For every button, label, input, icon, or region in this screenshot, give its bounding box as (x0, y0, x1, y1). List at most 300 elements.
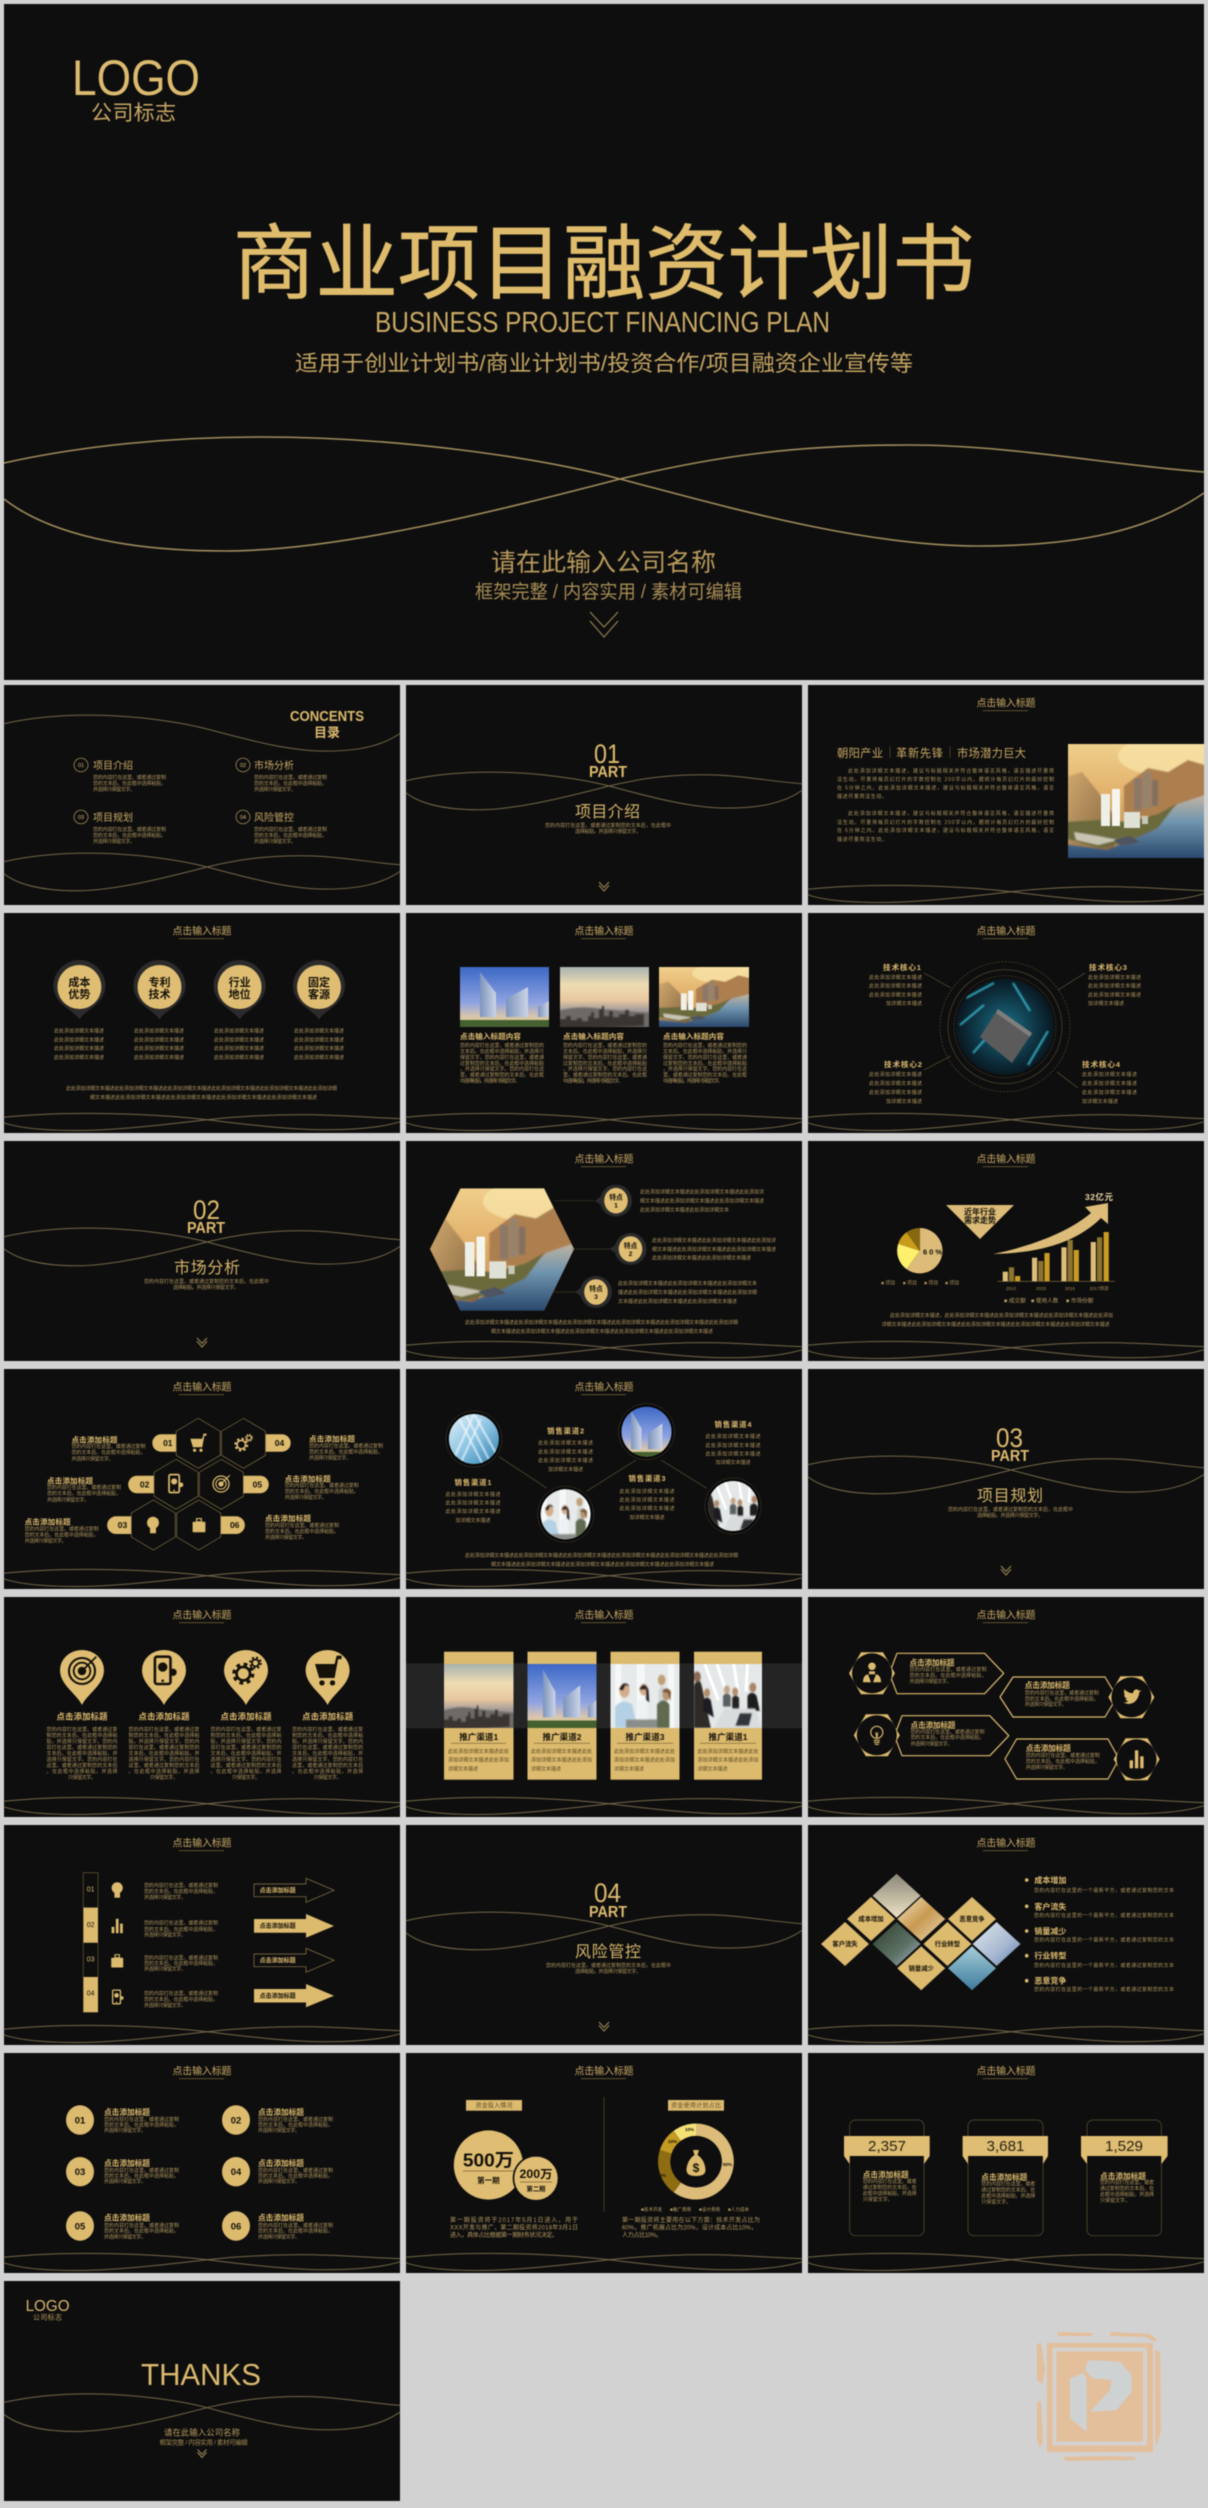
item 01: 01 (78, 763, 84, 769)
icon: chevrons (198, 2450, 206, 2458)
item 05: 05 (75, 2222, 86, 2232)
item 04: 您的内容打在这里。或者通过复制 (254, 826, 327, 833)
risk list (1025, 1875, 1174, 1993)
panel: cover slide (4, 4, 1204, 680)
label: funding usage: 资金使用计划占比 (671, 2102, 721, 2110)
company name: 请在此输入公司名称 (491, 549, 716, 577)
column 1: 容打在这里。或者通过复制您的 (46, 1744, 118, 1751)
slide title: 点击输入标题 (574, 1152, 634, 1166)
step text 1 (144, 1882, 218, 1901)
label 03: 您的内容打在这里。或者通过复制 (25, 1526, 99, 1532)
phase text: 第一期投资将于2017年5月1日进入，用于 (450, 2216, 578, 2224)
icon: bulb (854, 1714, 900, 1756)
step text 2: 并选择只保留文字。 (144, 1932, 186, 1938)
panel: three images (406, 913, 802, 1133)
pin: 成本优势: 优势 (68, 987, 90, 1001)
channel 2: 销售渠道2 (547, 1426, 584, 1436)
circle: phase one (454, 2130, 523, 2200)
channel 2: 此处添加详细文本描述 (538, 1457, 593, 1464)
diamond labels: 行业转型 (935, 1939, 960, 1948)
step text 3: 您的内容打在这里。或者通过复制 (144, 1954, 218, 1962)
dotted connectors (552, 1201, 611, 1292)
summary text: 详细文本描述此处添加详细文本描述此处添加详细文本描述此处添加详细文本描述此处添加详细文本描述 (882, 1321, 1110, 1328)
column 3 (210, 1712, 282, 1781)
card 2: 详细文本描述 (531, 1766, 561, 1772)
item 04: 并选择只保留文字。 (254, 838, 296, 845)
photo D (705, 1478, 762, 1534)
wave decoration (4, 437, 1204, 551)
column 2: 容打在这里。或者通过复制您的 (128, 1744, 200, 1751)
photo B (618, 1404, 676, 1460)
icon: money bag (686, 2150, 706, 2176)
pie chart: 60% (923, 1248, 942, 1256)
panel: hexagon labels (808, 1597, 1204, 1817)
card 3,681: 3,681 (986, 2138, 1024, 2155)
column 1 text: 文本后。在此框中选择粘贴，并选择只 (460, 1048, 544, 1055)
feature 1 text (640, 1188, 764, 1214)
risk list: 销量减少 (1034, 1926, 1066, 1936)
label box D (1005, 1739, 1119, 1779)
column 1 text: ，并选择只保留文字。您的内容打在这 (460, 1066, 544, 1072)
label 04: 您的内容打在这里。或者通过复制 (309, 1442, 383, 1450)
item 02 (236, 758, 327, 793)
step bar: 02 (87, 1922, 95, 1929)
label box C: 您的内容打在这里。或者通过复制 (910, 1728, 984, 1736)
paragraph 1: 在 5分钟之内。此处添加详细文本描述，建议与标题相关并符合整体语言风格，语言 (837, 784, 1054, 792)
item 04: 04 (240, 815, 246, 821)
label 06: 您的内容打在这里。或者通过复制 (265, 1522, 339, 1529)
tab numbers: 04 (275, 1438, 284, 1448)
logo: 公司标志 (91, 102, 176, 125)
column texts: 此处添加详细文本描述 (134, 1036, 184, 1044)
channel 2: 此处添加详细文本描述 (538, 1448, 593, 1456)
label 05: 点击添加标题 (285, 1474, 331, 1484)
wave bottom (4, 853, 400, 891)
item 06: 06 (231, 2222, 241, 2232)
panel: thanks (4, 2281, 400, 2501)
column 4: 只保留文字。 (314, 1774, 342, 1781)
panel: part 04 (406, 1825, 802, 2045)
description: 您的内容打在这里。或者通过复制您的文本后，在此框中 (948, 1506, 1073, 1513)
slide title: 点击输入标题 (976, 1152, 1036, 1166)
diamond photos (873, 1874, 1021, 1990)
pin: 固定客源 (293, 960, 345, 1020)
triangle callout: 需求走势 (964, 1215, 996, 1225)
slide title: 点击输入标题 (172, 1608, 232, 1622)
card 3: 详细文本描述 (614, 1766, 644, 1772)
risk list: 恶意竞争 (1034, 1976, 1066, 1986)
label box B: 您的内容打在这里。或者通过复制 (1025, 1690, 1099, 1696)
logo: LOGO (26, 2298, 70, 2315)
column 1 text (460, 1031, 544, 1084)
column 3: 。在此框中选择粘贴，并选择 (210, 1768, 282, 1775)
channel 1: 加详细文本描述 (456, 1517, 490, 1524)
channel 4: 此处添加详细文本描述 (706, 1450, 760, 1458)
summary text (66, 1085, 337, 1101)
card 2,357: 您的内容打在这里。或者 (863, 2178, 917, 2185)
card 4: 推广渠道1 (708, 1732, 748, 1742)
label box D: 您的内容打在这里。或者通过复制 (1026, 1752, 1100, 1759)
step text 3 (144, 1954, 218, 1972)
panel: hexagon icons (4, 1369, 400, 1589)
card 3: 推广渠道3 (626, 1732, 665, 1742)
circle: phase two: 第二期 (527, 2184, 545, 2193)
tabs (107, 1434, 291, 1534)
item 04 (236, 810, 327, 845)
description: 您的内容打在这里。或者通过复制您的文本后，在此框中 (546, 1962, 671, 1969)
item 03: 您的文本后，在此框中选择粘贴， (93, 832, 166, 839)
part number: 03 (996, 1423, 1023, 1453)
column 3 text: 您的内容打在这里，或者通过复制您的 (663, 1042, 747, 1049)
panel: sales channels (406, 1369, 802, 1589)
slide title: 点击输入标题 (976, 696, 1036, 710)
label 05: 您的内容打在这里。或者通过复制 (285, 1482, 359, 1489)
label: 技术核心2 (869, 1059, 922, 1105)
column 2 text: 里，或者通过复制您的文本后。在此框 (563, 1072, 647, 1078)
step text 1: 您的文本后。在此框中选择粘贴， (144, 1888, 218, 1895)
card 1,529: 通过复制您的文本后。在 (1100, 2185, 1154, 2192)
item 03: 您的文本后。在此框中选择粘贴， (104, 2172, 179, 2180)
panel: market charts (808, 1141, 1204, 1361)
label 06: 并选择只保留文字。 (265, 1534, 307, 1541)
pie legend: ■ 项目 (903, 1280, 917, 1286)
grey strip (406, 1663, 802, 1728)
tab numbers: 05 (253, 1480, 262, 1490)
label 04: 点击添加标题 (309, 1434, 355, 1444)
panel: three features hexagon (406, 1141, 802, 1361)
column 1 (46, 1712, 118, 1781)
slide title: 点击输入标题 (172, 2064, 232, 2078)
item 05: 并选择只保留文字。 (104, 2234, 146, 2240)
slide title: 点击输入标题 (574, 1608, 634, 1622)
feature 3 text: 描述此处添加详细文本描述此处添加详细文本描述此处添加详细 (618, 1289, 757, 1296)
step bar (83, 1873, 98, 2012)
badge: 特点3 (575, 1276, 612, 1308)
logo (26, 2298, 70, 2322)
donut chart (657, 2124, 734, 2199)
column 1 text: 过复制您的文本后。在此框中选择粘贴 (460, 1060, 544, 1067)
item 02 (222, 2105, 333, 2135)
part number: 02 (193, 1195, 220, 1225)
slide title: 点击输入标题 (574, 2064, 634, 2078)
phase text: XXX开发与推广，第二期投资将2018年3月1日 (450, 2224, 578, 2232)
channel 4 (706, 1420, 760, 1466)
icon: bars (1114, 1738, 1160, 1780)
card 1 (442, 1652, 516, 1780)
section title: 项目介绍 (575, 803, 640, 821)
panel: four advantages (4, 913, 400, 1133)
step text 4 (144, 1990, 218, 2009)
card 2,357: 只保留文字。 (863, 2196, 893, 2203)
tab numbers: 06 (230, 1520, 240, 1530)
description: 您的内容打在这里。或者通过复制您的文本后，在此框中 (545, 822, 671, 829)
card 3,681: 点击添加标题 (981, 2172, 1028, 2182)
column 1: 您的内容打在这里。或者通过复 (46, 1726, 118, 1733)
column 2 text: 中选择粘贴，并选择只保留文字。 (563, 1078, 623, 1084)
usage text: 60%，推广拓展占比为20%，设计成本占比10%， (622, 2224, 757, 2232)
column 2: 这里。或者通过复制您的文本后 (128, 1762, 200, 1769)
item 04: 并选择只保留文字。 (258, 2178, 300, 2185)
step text 4: 并选择只保留文字。 (144, 2002, 186, 2009)
label 05: 并选择只保留文字。 (285, 1494, 327, 1501)
card 1,529: 您的内容打在这里。或者 (1100, 2179, 1154, 2186)
channel 4: 此处添加详细文本描述 (706, 1442, 760, 1449)
panel: contents (4, 685, 400, 905)
badge: 特点1 (595, 1185, 632, 1217)
description: 选择粘贴，并选择只保留文字。 (575, 1968, 641, 1975)
label: funding input (466, 2100, 522, 2111)
card 2,357: 此框中选择粘贴，并选择 (863, 2190, 917, 2197)
label box A (889, 1653, 1004, 1694)
label 03: 您的文本后。在此框中选择粘贴， (25, 1532, 99, 1538)
image: towers (460, 967, 549, 1027)
label: 技术核心3 (1088, 962, 1141, 1007)
column 3 text: 过复制您的文本后。在此框中选择粘贴 (663, 1060, 747, 1067)
summary text: 此处添加详细文本描述此处添加详细文本描述此处添加详细文本描述此处添加详细文本描述此处添加详细文本描述此处添加详细 (465, 1552, 738, 1559)
pin: gears (224, 1650, 268, 1705)
description (948, 1506, 1073, 1519)
item 02: 02 (240, 763, 246, 769)
panel: promotion channels (406, 1597, 802, 1817)
slide title: 点击输入标题 (574, 1380, 634, 1394)
column 2 text: 您的内容打在这里，或者通过复制您的 (563, 1042, 647, 1049)
label: 技术核心1: 加详细文本描述 (886, 1000, 922, 1007)
summary text: 细文本描述此处添加详细文本描述此处添加详细文本描述此处添加详细文本描述此处添加详细文本描述 (491, 1328, 713, 1335)
column texts: 此处添加详细文本描述 (54, 1045, 104, 1052)
label 02: 点击添加标题 (47, 1476, 93, 1486)
tab numbers: 02 (140, 1480, 150, 1490)
label 01: 您的内容打在这里。或者通过复制 (72, 1443, 146, 1450)
pie legend: ■ 项目 (945, 1280, 959, 1286)
step text 1: 并选择只保留文字。 (144, 1894, 186, 1901)
slide title: 点击输入标题 (574, 924, 634, 938)
panel: six numbered items (4, 2053, 400, 2273)
column 1: 制您的文本后。在此框中选择粘 (46, 1732, 118, 1739)
diamond labels: 销量减少 (909, 1963, 934, 1972)
label: 技术核心4: 加详细文本描述 (1082, 1098, 1118, 1105)
icons (147, 1434, 252, 1533)
image: circuit chip (956, 978, 1054, 1076)
donut chart: 60% (723, 2162, 732, 2167)
connector lines (499, 1457, 707, 1491)
item 05 (66, 2211, 179, 2241)
risk list: 您的内容打在这里的一个最新平方，或者通过复制您的文本 (1034, 1937, 1174, 1944)
description: 选择粘贴，并选择只保留文字。 (977, 1512, 1043, 1519)
pie legend: ■ 项目 (881, 1280, 895, 1286)
phase text: 进入，具体占比根据第一期财务状况决定。 (450, 2231, 558, 2239)
donut chart: 20% (657, 2173, 666, 2178)
label box D: 点击添加标题 (1026, 1743, 1071, 1753)
item 05: 点击添加标题 (104, 2212, 150, 2222)
item 03: 03 (78, 815, 84, 821)
step bar: 03 (87, 1956, 95, 1964)
label: 技术核心3: 技术核心3 (1089, 962, 1127, 972)
column 2 text: 过复制您的文本后。在此框中选择粘贴 (563, 1060, 647, 1067)
risk list: 客户流失 (1034, 1901, 1066, 1911)
risk list: 成本增加 (1034, 1875, 1066, 1885)
label 02: 您的内容打在这里。或者通过复制 (47, 1484, 121, 1491)
item 01: 您的内容打在这里。或者通过复制 (104, 2116, 179, 2123)
step text 3: 并选择只保留文字。 (144, 1966, 186, 1972)
item 04: 04 (231, 2167, 242, 2178)
logo: LOGO (72, 50, 200, 106)
card 3,681: 通过复制您的文本后。在 (981, 2186, 1035, 2194)
pin: 专利技术 (134, 960, 186, 1020)
feature 1 text: 此处添加详细文本描述此处添加详细文本描述此处添加详 (640, 1188, 764, 1196)
badge: 特点1: 1 (614, 1203, 618, 1210)
phase text (450, 2216, 578, 2239)
channel 4: 加详细文本描述 (716, 1459, 750, 1466)
column 3 text: ，并选择只保留文字。您的内容打在这 (663, 1066, 747, 1072)
column texts: 此处添加详细文本描述 (54, 1054, 104, 1061)
label: 技术核心1 (869, 962, 922, 1007)
column 3: 您的内容打在这里。或者通过复 (210, 1726, 282, 1733)
pie legend: ■ 项目 (924, 1280, 938, 1286)
paragraph 1: 描述尽量简洁生动。 (837, 793, 887, 800)
summary text: 细文本描述此处添加详细文本描述此处添加详细文本描述此处添加详细文本描述此处添加详细文本描述 (90, 1094, 317, 1101)
donut legend: ■推广费用 (670, 2206, 692, 2213)
card 1: 添加详细文本描述此处添加 (448, 1756, 509, 1764)
label: 技术核心1: 技术核心1 (883, 962, 922, 972)
column 4: 这里。或者通过复制您的文本后 (292, 1762, 363, 1769)
bar legend: ■ 成交额 (1004, 1296, 1026, 1304)
donut legend (641, 2206, 750, 2213)
label box B (1000, 1677, 1117, 1717)
icon: chevrons (599, 882, 609, 891)
item 03: 您的内容打在这里。或者通过复制 (93, 826, 166, 833)
logo: 公司标志 (33, 2312, 62, 2322)
column 2: 制您的文本后。在此框中选择粘 (128, 1732, 200, 1739)
label: 技术核心3: 加详细文本描述 (1088, 1000, 1124, 1007)
label 02 (47, 1476, 121, 1504)
donut chart: 10% (668, 2139, 677, 2144)
channel 1: 销售渠道1 (454, 1478, 492, 1487)
badge: 特点1: 特点 (609, 1193, 623, 1202)
subheading: 市场潜力巨大 (957, 746, 1026, 760)
step icons (111, 1882, 124, 2004)
label box A: 并选择只保留文字。 (910, 1678, 952, 1685)
card 1,529: 点击添加标题 (1100, 2171, 1146, 2181)
photo A (446, 1411, 502, 1467)
card 3: 添加详细文本描述此处添加 (614, 1756, 675, 1764)
label 02: 您的文本后。在此框中选择粘贴， (47, 1490, 121, 1497)
item 01: 点击添加标题 (104, 2107, 150, 2117)
diamond labels: 恶意竞争 (959, 1914, 985, 1923)
wave top (4, 715, 400, 751)
column texts: 此处添加详细文本描述 (54, 1028, 104, 1034)
label box C: 并选择只保留文字。 (910, 1740, 952, 1748)
usage subtitle: 适用于创业计划书/商业计划书/投资合作/项目融资企业宣传等 (295, 351, 913, 376)
risk list: 您的内容打在这里的一个最新平方，或者通过复制您的文本 (1034, 1887, 1174, 1894)
step text 4: 您的文本后。在此框中选择粘贴， (144, 1996, 218, 2003)
label 01: 并选择只保留文字。 (72, 1456, 114, 1462)
feature 1 text: 细文本描述此处添加详细文本描述此处添加详细文本描述 (640, 1198, 764, 1204)
description (546, 1962, 671, 1975)
pin: 固定客源: 客源 (308, 987, 330, 1001)
item 03: 您的内容打在这里。或者通过复制 (104, 2167, 179, 2174)
bar legend: ■ 使用人数 (1031, 1296, 1059, 1304)
pin: 成本优势: 成本 (68, 975, 90, 989)
circle: phase two: 200万 (520, 2168, 552, 2181)
label: 技术核心4: 此处添加详细文本描述 (1082, 1080, 1137, 1087)
arrow 3: 点击添加标题 (260, 1956, 296, 1964)
panel: three stat cards (808, 2053, 1204, 2273)
icon: money bag: $ (693, 2161, 700, 2175)
card 2: 此处添加详细文本描述此处 (531, 1748, 592, 1755)
bar chart (998, 1232, 1115, 1292)
item 04: 您的内容打在这里。或者通过复制 (258, 2167, 333, 2174)
channel 2 (538, 1426, 593, 1473)
column 3: 点击添加标题 (220, 1712, 272, 1722)
label 01: 点击添加标题 (72, 1434, 118, 1444)
column 3: 容打在这里。或者通过复制您的 (210, 1744, 282, 1751)
part number: PART (589, 764, 627, 781)
bar legend (1004, 1296, 1094, 1304)
column texts: 此处添加详细文本描述 (214, 1036, 264, 1044)
paragraph 2 (837, 810, 1054, 843)
description (144, 1278, 269, 1291)
item 03: 并选择只保留文字。 (93, 838, 135, 845)
label: funding input: 资金投入情况 (476, 2102, 512, 2110)
item 04: 您的文本后，在此框中选择粘贴， (254, 832, 327, 839)
item 03 (66, 2157, 179, 2186)
label 01: 您的文本后。在此框中选择粘贴， (72, 1449, 146, 1456)
step text 3: 您的文本后。在此框中选择粘贴， (144, 1960, 218, 1967)
label box A: 点击添加标题 (910, 1658, 955, 1668)
channel 4: 销售渠道4 (714, 1420, 752, 1429)
heading: contents: 目录 (314, 725, 340, 740)
item 01: 01 (75, 2116, 86, 2126)
badge: 特点3: 特点 (589, 1284, 603, 1293)
item 02: 并选择只保留文字。 (258, 2127, 300, 2134)
badge: 特点3: 3 (594, 1294, 598, 1301)
column 2: 选择只保留文字。您的内容打在 (128, 1756, 200, 1763)
bar chart: 2013 (1006, 1286, 1017, 1291)
column 3: 贴，并选择只保留文字。您的内 (210, 1738, 282, 1745)
donut chart: 10% (685, 2127, 694, 2132)
donut legend: ■技术开发 (641, 2206, 663, 2213)
slide title: 点击输入标题 (976, 1836, 1036, 1850)
column 2 (128, 1712, 200, 1781)
column 2: 点击添加标题 (138, 1712, 190, 1722)
heading: contents: CONCENTS (290, 709, 364, 725)
column texts: 此处添加详细文本描述 (214, 1028, 264, 1034)
label 04: 并选择只保留文字。 (309, 1454, 351, 1462)
column 1: 贴，并选择只保留文字。您的内 (46, 1738, 118, 1745)
item 04 (222, 2157, 333, 2186)
label: 技术核心2: 此处添加详细文本描述 (869, 1071, 922, 1078)
column texts: 此处添加详细文本描述 (294, 1045, 344, 1052)
watermark stamp (1037, 2332, 1161, 2461)
company name: 请在此输入公司名称 (164, 2428, 241, 2438)
label: 技术核心2: 此处添加详细文本描述 (869, 1080, 922, 1087)
column 1 text: 中选择粘贴，并选择只保留文字。 (460, 1078, 520, 1084)
icon: people (849, 1652, 895, 1694)
thanks heading: THANKS (141, 2357, 261, 2392)
image: bay (656, 963, 758, 1030)
description: 选择粘贴，并选择只保留文字。 (575, 828, 641, 835)
column 2 text: ，并选择只保留文字。您的内容打在这 (563, 1066, 647, 1072)
column 4: 您的内容打在这里。或者通过复 (292, 1726, 363, 1733)
column 1: 文本后。在此框中选择粘贴，并 (46, 1750, 118, 1757)
card 3,681 (963, 2120, 1048, 2236)
column 2 text: 点击输入标题内容 (563, 1031, 624, 1041)
pin: 成本优势 (53, 960, 105, 1020)
card 2: 推广渠道2 (542, 1732, 582, 1742)
channel 3: 此处添加详细文本描述 (620, 1488, 674, 1495)
section title: 风险管控 (575, 1943, 641, 1961)
item 06: 点击添加标题 (258, 2212, 304, 2222)
